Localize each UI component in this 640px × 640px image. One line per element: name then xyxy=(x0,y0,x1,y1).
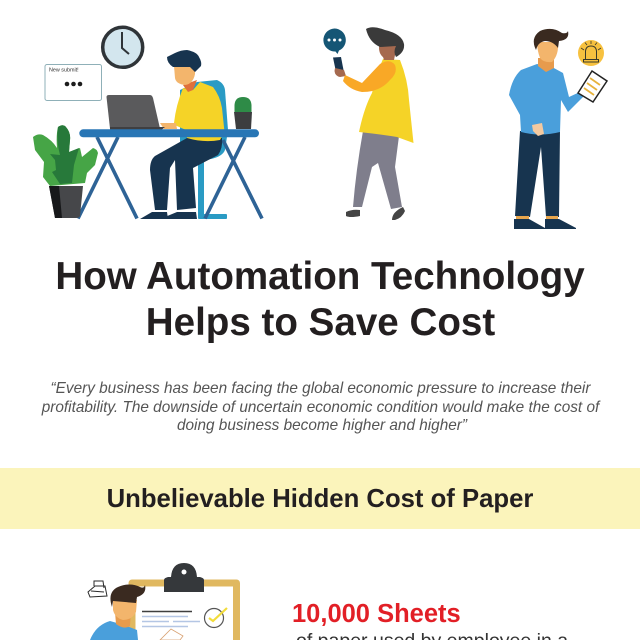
icon: check mark xyxy=(204,608,227,628)
clipboard clip xyxy=(164,563,204,592)
head xyxy=(167,50,201,92)
quote text xyxy=(41,380,601,434)
paper in hand xyxy=(160,629,183,640)
shoes xyxy=(346,207,405,220)
trousers xyxy=(150,138,222,210)
desk top xyxy=(79,129,259,137)
shirt xyxy=(359,59,414,143)
laptop xyxy=(106,95,165,130)
clipboard board xyxy=(132,583,236,640)
shirt xyxy=(509,64,585,134)
head and hair xyxy=(366,27,404,60)
shoes xyxy=(140,212,197,219)
shoes xyxy=(514,219,576,229)
callout: new submit notification: New submit! xyxy=(49,68,79,74)
phone and hand xyxy=(333,57,346,77)
section banner: hidden cost of paper: Unbelievable Hidden Cost of Paper xyxy=(107,485,533,513)
stat: 10,000 sheets xyxy=(292,600,568,640)
illustration: clipboard with person xyxy=(88,563,236,640)
illustration: worker at desk xyxy=(33,27,262,219)
hand xyxy=(160,123,177,129)
trousers xyxy=(353,131,402,209)
stat: 10,000 sheets: 10,000 Sheets xyxy=(292,600,461,628)
icon: tablet checklist xyxy=(578,71,607,102)
arm xyxy=(343,61,396,92)
icon: alarm badge xyxy=(578,40,604,66)
quote text: profitability. The downside of uncertain economic condition would make the cost of xyxy=(41,399,601,416)
icon: wall clock xyxy=(103,27,143,67)
plant on desk xyxy=(234,97,252,129)
small line icon xyxy=(88,581,107,597)
illustration: person with phone xyxy=(323,27,414,220)
quote text: doing business become higher and higher” xyxy=(177,417,468,434)
chair xyxy=(180,80,228,219)
floor plant xyxy=(33,125,98,218)
trousers xyxy=(515,130,560,217)
icon: chat bubble xyxy=(323,28,346,54)
person xyxy=(90,584,145,640)
title: How Automation Technology xyxy=(55,255,585,298)
desk legs xyxy=(78,137,262,218)
illustration: person with tablet xyxy=(509,29,607,229)
callout: new submit notification xyxy=(45,64,102,100)
head and hair xyxy=(534,29,568,72)
quote text: “Every business has been facing the global economic pressure to increase their xyxy=(51,380,591,397)
title xyxy=(55,255,585,344)
shirt xyxy=(160,82,224,141)
ankles xyxy=(516,216,558,220)
hand xyxy=(532,123,544,136)
document lines xyxy=(142,612,200,626)
title: Helps to Save Cost xyxy=(146,301,495,344)
section banner: hidden cost of paper xyxy=(0,468,640,529)
